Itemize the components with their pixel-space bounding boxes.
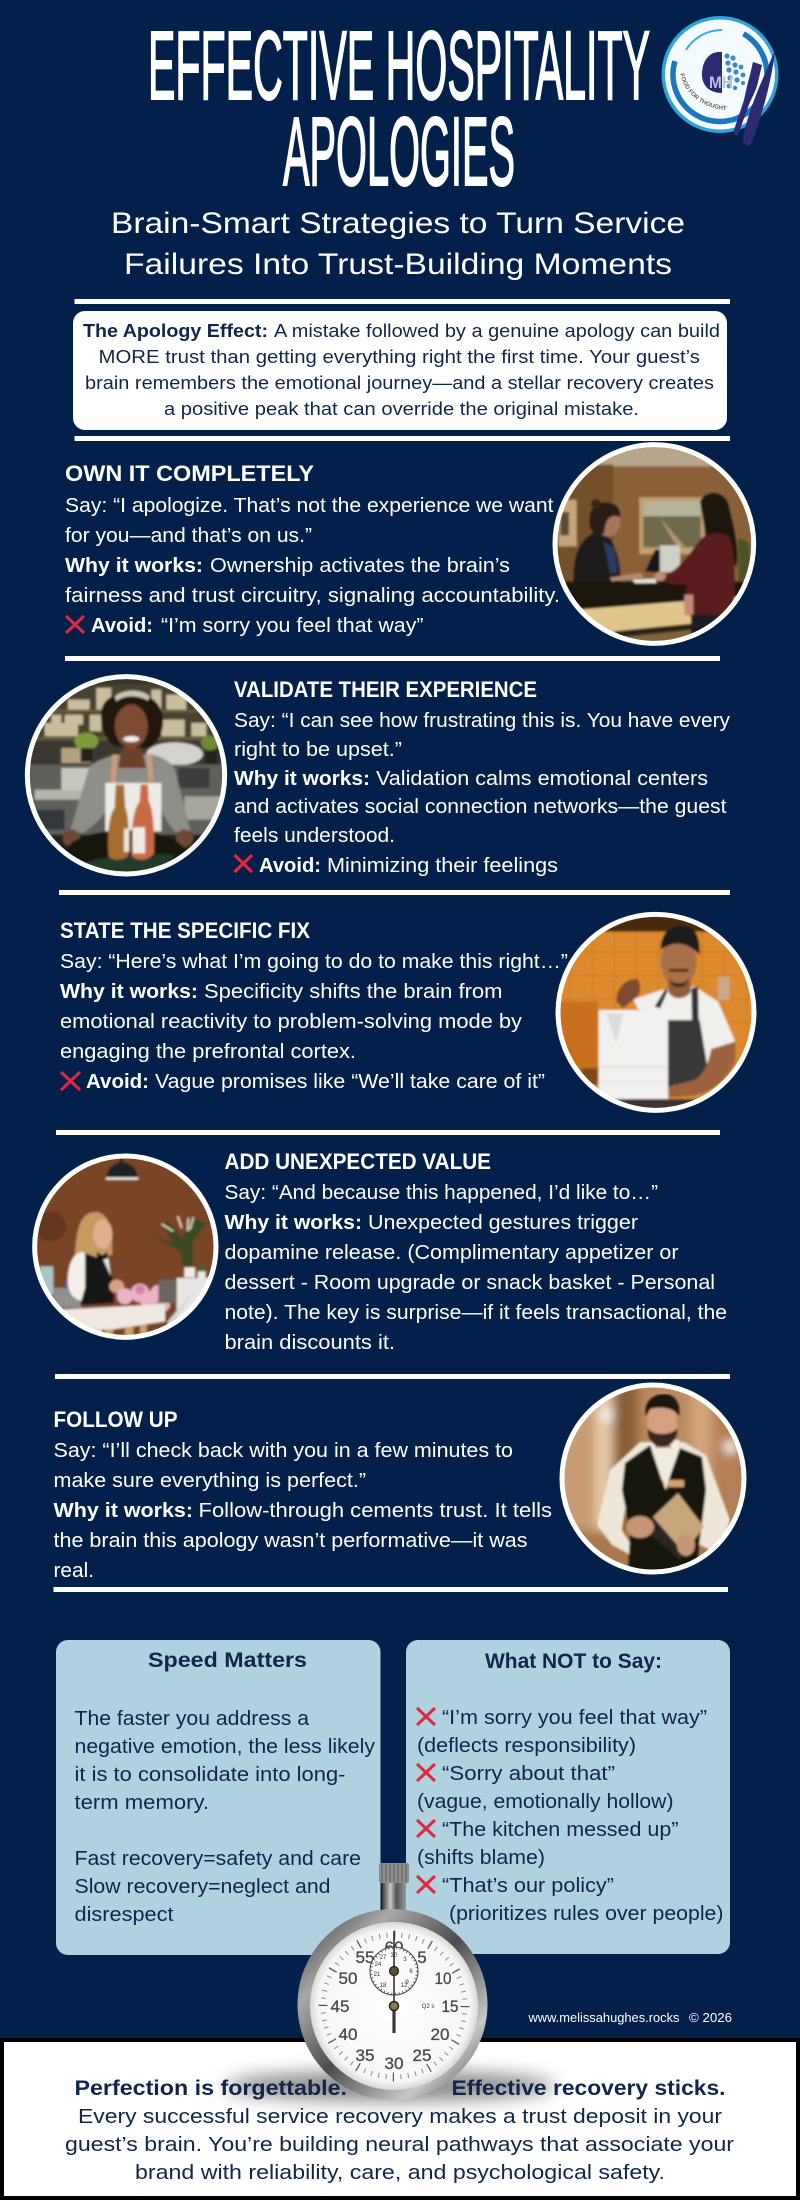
item 4 [417, 1875, 724, 1925]
closing body: guest’s brain. You’re building neural pathways that associate your [65, 2133, 734, 2156]
photo: smiling server with tray [24, 674, 228, 876]
credit line: www.melissahughes.rocks [527, 2011, 680, 2025]
small sub-dial: 6 [409, 1969, 413, 1975]
stopwatch hands [390, 1931, 398, 2033]
heading: Speed Matters [148, 1649, 307, 1672]
why it works: note). The key is surprise—if it feels transactional, the [224, 1301, 727, 1324]
photo: waiter with folder [560, 1382, 746, 1574]
small sub-dial: 21 [374, 1972, 381, 1978]
stopwatch shadow [225, 2071, 555, 2101]
heading: STATE THE SPECIFIC FIX [60, 918, 310, 943]
item 1 [417, 1707, 707, 1757]
panel: the apology effect [73, 311, 727, 430]
heading: FOLLOW UP [54, 1407, 178, 1432]
panel: validate their experience [18, 668, 731, 883]
panel: the apology effect: brain remembers the emotional journey—and a stellar recovery creates [85, 372, 714, 393]
say text [234, 709, 731, 761]
item 3: “The kitchen messed up” [442, 1819, 678, 1841]
say text [65, 494, 554, 547]
small sub-dial: 3 [403, 1957, 407, 1963]
heading: What NOT to Say: [485, 1650, 662, 1673]
closing heading left: Perfection is forgettable. [74, 2077, 347, 2100]
panel: what not to say [406, 1640, 730, 1954]
say text: Say: “I can see how frustrating this is. You have every [234, 709, 731, 732]
panel: speed matters [56, 1640, 380, 1955]
item 4: “That’s our policy” [442, 1875, 614, 1897]
icon: stopwatch [298, 1863, 488, 2100]
panel: own it completely [65, 438, 765, 653]
why it works [234, 767, 727, 847]
item 2 [417, 1763, 674, 1813]
panel: closing message [2, 2040, 798, 2198]
small sub-dial: 18 [380, 1983, 387, 1989]
body text: The faster you address a [74, 1708, 310, 1730]
say text: Say: “Here’s what I’m going to do to make this right…” [60, 950, 568, 973]
small sub-dial: 9 [405, 1980, 409, 1986]
dial numbers: 10 [434, 1969, 452, 1988]
small sub-dial: 12 [401, 1983, 408, 1989]
credit line: © 2026 [689, 2011, 732, 2025]
panel: the apology effect: MORE trust than getting everything right the first time. Your guest’s [98, 346, 700, 367]
dial numbers: 40 [338, 2025, 358, 2044]
avoid: Vague promises like “We’ll take care of it” [155, 1070, 545, 1093]
small sub-dial: 24 [375, 1962, 382, 1968]
closing body: brand with reliability, care, and psychological safety. [135, 2161, 665, 2184]
avoid: Avoid: [259, 854, 321, 877]
why it works: dessert - Room upgrade or snack basket - Personal [224, 1271, 715, 1294]
why it works: feels understood. [234, 824, 395, 847]
why it works: the brain this apology wasn’t performative—it was [54, 1529, 528, 1552]
logo brain [702, 52, 745, 93]
item 1: (deflects responsibility) [417, 1735, 636, 1757]
closing body [65, 2105, 734, 2184]
why it works [65, 554, 560, 607]
avoid [234, 854, 558, 877]
item 4: (prioritizes rules over people) [449, 1903, 724, 1925]
item 3 [417, 1819, 678, 1869]
panel: the apology effect: The Apology Effect: [83, 320, 268, 341]
why it works: Ownership activates the brain’s [210, 554, 510, 577]
item 2: “Sorry about that” [442, 1763, 615, 1785]
dial numbers [330, 1938, 458, 2073]
why it works: Why it works: [234, 767, 370, 790]
dial numbers: 5 [417, 1948, 427, 1967]
item 2: (vague, emotionally hollow) [417, 1791, 674, 1813]
heading: OWN IT COMPLETELY [65, 461, 314, 486]
why it works: Why it works: [60, 980, 198, 1003]
why it works: Why it works: [54, 1499, 193, 1522]
say text: Say: “And because this happened, I’d like to…” [224, 1181, 658, 1204]
panel: follow up [54, 1380, 755, 1582]
small sub-dial: 27 [380, 1955, 387, 1961]
why it works [60, 980, 523, 1063]
why it works: Validation calms emotional centers [376, 767, 708, 790]
body text: it is to consolidate into long- [74, 1764, 346, 1786]
closing body: Every successful service recovery makes a trust deposit in your [78, 2105, 722, 2128]
dial numbers: 25 [412, 2046, 432, 2065]
dial numbers: 30 [384, 2054, 404, 2073]
body text [74, 1708, 375, 1926]
why it works: real. [54, 1559, 94, 1582]
panel: state the specific fix [60, 905, 768, 1120]
body text: Fast recovery=safety and care [74, 1848, 361, 1870]
say text: Say: “I’ll check back with you in a few minutes to [54, 1439, 513, 1462]
why it works: engaging the prefrontal cortex. [60, 1040, 356, 1063]
panel: the apology effect: A mistake followed by a genuine apology can build [274, 320, 720, 341]
say text: Say: “I apologize. That’s not the experience we want [65, 494, 554, 517]
logo fork and knife [734, 50, 775, 145]
avoid: Avoid: [91, 614, 153, 637]
logo: food for thought plate [662, 16, 778, 146]
why it works: Unexpected gestures trigger [368, 1211, 638, 1234]
icon: stopwatch: Q2 s [422, 2004, 434, 2010]
why it works: and activates social connection networks—the guest [234, 795, 727, 818]
title [148, 11, 650, 206]
why it works: Follow-through cements trust. It tells [198, 1499, 552, 1522]
photo: concierge at desk with flowers [32, 1154, 218, 1340]
dial numbers: 20 [430, 2025, 450, 2044]
why it works: emotional reactivity to problem-solving mode by [60, 1010, 523, 1033]
subtitle: Brain-Smart Strategies to Turn Service [111, 207, 685, 240]
say text: right to be upset.” [234, 738, 402, 761]
say text [54, 1439, 513, 1492]
say text: for you—and that’s on us.” [65, 524, 312, 547]
dial numbers: 45 [330, 1997, 350, 2016]
why it works [54, 1499, 552, 1582]
panel: the apology effect: a positive peak that can override the original mistake. [164, 398, 639, 419]
body text: Slow recovery=neglect and [74, 1876, 330, 1898]
body text: negative emotion, the less likely [74, 1736, 375, 1758]
why it works: Specificity shifts the brain from [204, 980, 502, 1003]
logo initials: MH [709, 73, 733, 92]
avoid: Minimizing their feelings [327, 854, 558, 877]
why it works: Why it works: [224, 1211, 362, 1234]
why it works: fairness and trust circuitry, signaling accountability. [65, 584, 560, 607]
dial numbers: 60 [384, 1938, 404, 1957]
avoid: Avoid: [86, 1070, 149, 1093]
body text: term memory. [74, 1792, 209, 1814]
subtitle: Failures Into Trust-Building Moments [124, 248, 672, 281]
dial numbers: 55 [356, 1948, 374, 1967]
photo: hotel reception desk [552, 442, 756, 646]
item 3: (shifts blame) [417, 1847, 545, 1869]
say text: make sure everything is perfect.” [54, 1469, 366, 1492]
subtitle [111, 207, 685, 281]
closing heading right: Effective recovery sticks. [452, 2077, 726, 2100]
why it works: Why it works: [65, 554, 203, 577]
why it works: dopamine release. (Complimentary appetizer or [224, 1241, 679, 1264]
body text: disrespect [74, 1904, 174, 1926]
dial numbers: 35 [356, 2046, 374, 2065]
photo: server handing over paper bag [556, 912, 756, 1113]
dial numbers: 50 [338, 1969, 358, 1988]
avoid: “I’m sorry you feel that way” [161, 614, 424, 637]
logo tagline: FOOD FOR THOUGHT [680, 73, 727, 110]
item 1: “I’m sorry you feel that way” [442, 1707, 707, 1729]
why it works [224, 1211, 727, 1354]
heading: VALIDATE THEIR EXPERIENCE [234, 677, 537, 702]
small sub-dial: 30 [391, 1953, 398, 1959]
why it works: brain discounts it. [224, 1331, 395, 1354]
dial numbers: 15 [442, 1997, 458, 2016]
small sub-dial [370, 1947, 418, 1995]
heading: ADD UNEXPECTED VALUE [224, 1149, 491, 1174]
panel: add unexpected value [25, 1148, 727, 1354]
